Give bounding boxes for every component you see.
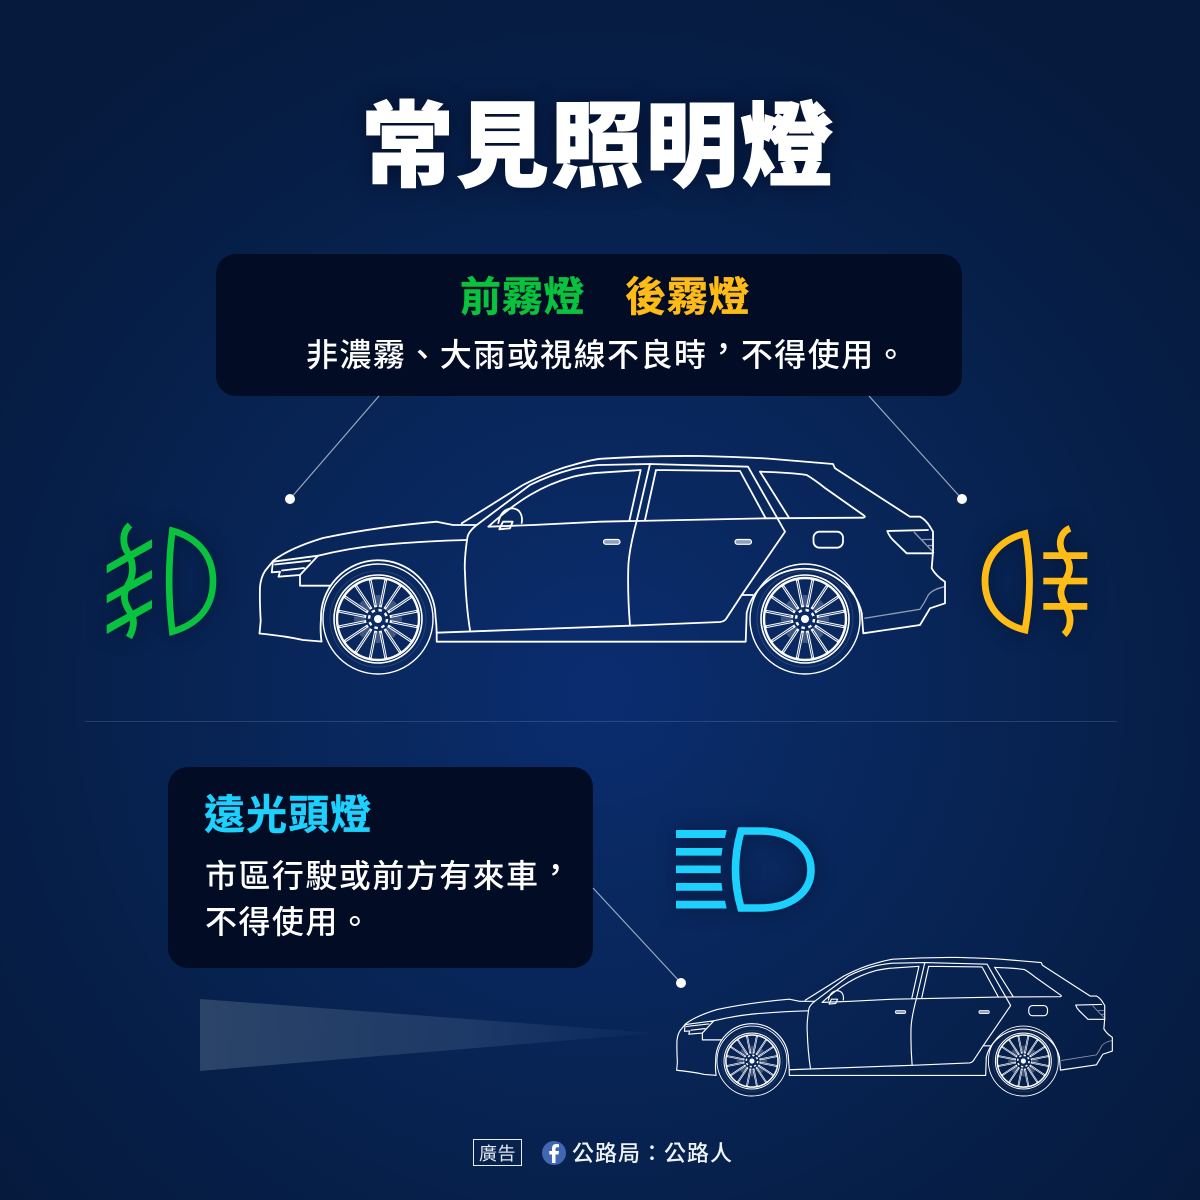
footer source text: 公路局：公路人	[572, 1141, 733, 1166]
dot: front fog	[285, 494, 295, 504]
icon: front fog light	[107, 525, 213, 638]
callout connector lines	[290, 396, 962, 983]
panel: fog lights	[216, 254, 962, 396]
dot: high beam	[676, 978, 686, 988]
heading: rear fog light: 後霧燈	[625, 274, 750, 320]
car: small outline	[677, 957, 1112, 1096]
car: large outline	[260, 456, 945, 674]
text: high beam rule: 市區行駛或前方有來車，	[205, 852, 573, 894]
text: fog light rule: 非濃霧、大雨或視線不良時，不得使用。	[306, 331, 908, 373]
title: 常見照明燈	[361, 95, 835, 199]
dot: rear fog	[957, 494, 967, 504]
text: high beam rule: 不得使用。	[205, 904, 372, 940]
icon: rear fog light	[985, 528, 1087, 634]
text: high beam rule	[205, 852, 573, 940]
ad label: 廣告	[479, 1144, 516, 1164]
facebook icon	[542, 1141, 566, 1165]
ad label	[473, 1139, 522, 1166]
icon: high beam	[676, 830, 811, 908]
heading: high beam: 遠光頭燈	[204, 792, 372, 838]
panel: high beam	[168, 767, 593, 968]
heading: front fog light: 前霧燈	[460, 274, 585, 320]
light beam	[200, 999, 655, 1071]
